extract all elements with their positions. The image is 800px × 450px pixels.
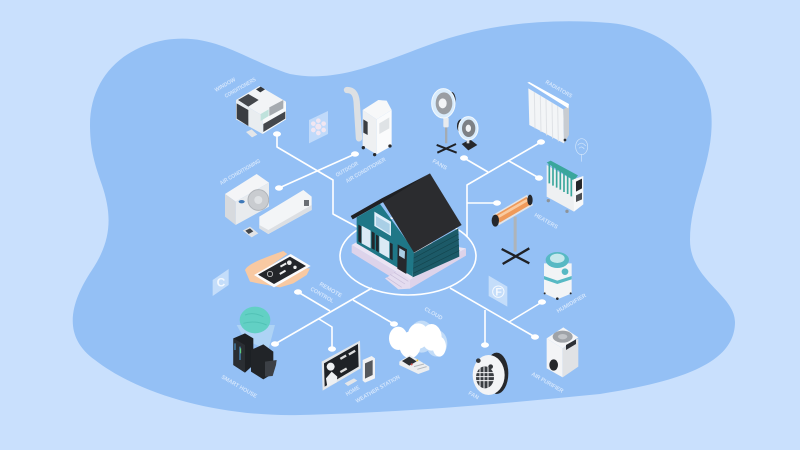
labels: SMART HOUSE [220, 375, 258, 400]
icon: house [351, 173, 466, 289]
labels: OUTDOOR [335, 161, 360, 179]
icon: air purifier [547, 327, 578, 377]
icon: window conditioner [236, 86, 286, 137]
labels: REMOTE [318, 282, 343, 299]
labels: CONDITIONERS [224, 77, 257, 100]
icon: remote control in hand [245, 251, 311, 287]
blue blob panel [73, 21, 735, 415]
icon: cloud [389, 321, 447, 358]
icon: F temperature card: F [495, 287, 502, 299]
icon: C temperature card [213, 269, 229, 296]
labels: FANS [431, 159, 448, 172]
connector network [271, 131, 546, 352]
icon: home weather station [322, 341, 375, 391]
labels: HUMIDIFIER [556, 293, 588, 315]
icon: cloud remote [399, 355, 429, 374]
icon: oil heater [547, 161, 583, 213]
labels: CONTROL [309, 287, 335, 305]
labels: FAN [467, 391, 480, 401]
labels: WEATHER STATION [355, 375, 401, 405]
icon: wifi sign [576, 139, 588, 162]
icon: F temperature card [489, 276, 507, 307]
labels: RADIATORS [544, 80, 573, 100]
icon: snowflake card [309, 111, 328, 143]
icon: air conditioning split unit [225, 174, 312, 237]
icon: outdoor air conditioner [347, 90, 392, 156]
icon: radiator [527, 82, 569, 143]
labels: AIR PURIFIER [530, 372, 564, 395]
labels: AIR CONDITIONER [345, 157, 387, 185]
icon: fans [432, 89, 478, 153]
labels: HEATERS [533, 213, 559, 231]
icon: smart house server and brain [233, 307, 277, 379]
labels: HOME [345, 385, 361, 398]
labels: WINDOW [214, 77, 238, 94]
labels [214, 77, 588, 405]
icon: infrared heater [492, 195, 533, 264]
labels: CLOUD [423, 307, 443, 322]
icon: humidifier [544, 252, 572, 300]
labels: AIR CONDITIONING [219, 159, 262, 187]
icon: fan heater [473, 353, 508, 395]
icon: C temperature card: C [217, 275, 226, 289]
